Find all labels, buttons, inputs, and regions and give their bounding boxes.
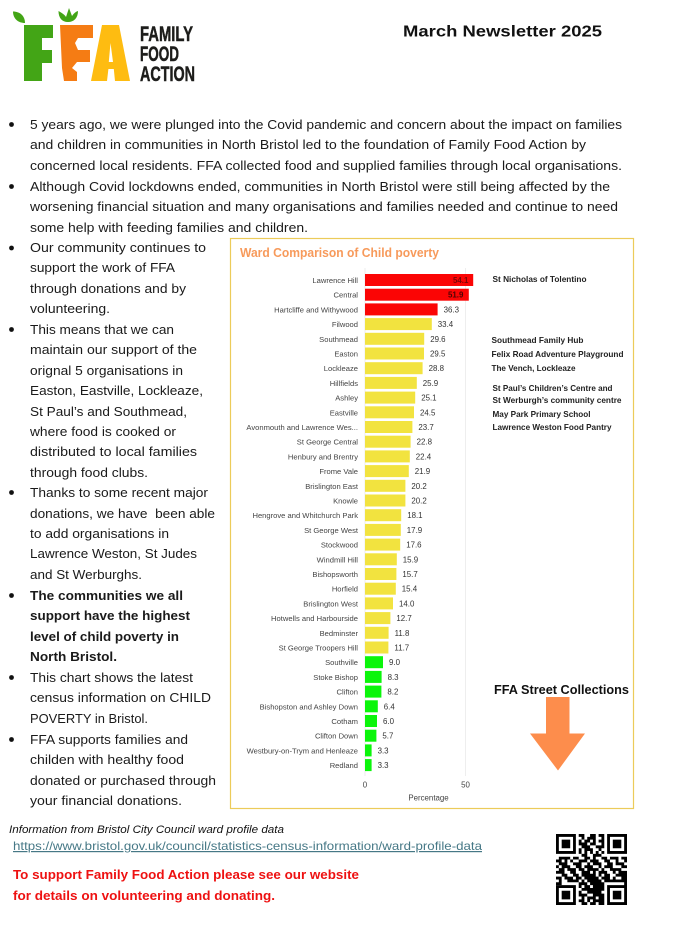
- bar: Southville: Southville: [325, 658, 358, 667]
- bar: Henbury and Brentry: 22.4: [416, 452, 432, 461]
- bar: St George Central: [297, 436, 433, 448]
- text block: chart note bullet: census information on CHILD: [30, 690, 211, 705]
- bar: St George Central: 22.8: [417, 438, 433, 447]
- text block: food support bullet: donated or purchased through: [30, 773, 216, 788]
- letter F green: [24, 25, 53, 81]
- bar: Hengrove and Whitchurch Park: [252, 509, 423, 521]
- text block: chart note bullet: POVERTY in Bristol.: [30, 711, 148, 726]
- bar: Brislington East: [305, 480, 427, 492]
- bar: Stockwood: 17.6: [406, 541, 422, 550]
- organisation labels: St Nicholas of Tolentino: [492, 274, 586, 284]
- text block: donations bullet: to add organisations in: [30, 526, 169, 541]
- bar: Bishopston and Ashley Down: [260, 700, 395, 712]
- bar: Frome Vale: [319, 465, 431, 477]
- bar: Ashley: [335, 392, 437, 404]
- text block: introduction bullets: worsening financial situation and many organisations and families needed and continue to need: [29, 199, 618, 214]
- bar: Westbury-on-Trym and Henleaze: [247, 744, 389, 756]
- text block: introduction bullets: some help with feeding families and children.: [30, 220, 308, 235]
- icon: QR code: [556, 834, 627, 905]
- bar: Stoke Bishop: [313, 671, 399, 683]
- bar: St George West: 17.9: [407, 526, 423, 535]
- bar: Central: [334, 289, 469, 301]
- organisation labels: St Werburgh’s community centre: [492, 395, 622, 405]
- text block: food support bullet: your financial donations.: [30, 793, 182, 808]
- text block: donations bullet: [9, 485, 215, 582]
- bar: Lawrence Hill: Lawrence Hill: [312, 276, 358, 285]
- bar: Brislington East: 20.2: [411, 482, 427, 491]
- bar: Redland: [330, 759, 389, 771]
- bar: Hotwells and Harbourside: Hotwells and Harbourside: [271, 614, 358, 623]
- organisation labels: [492, 274, 624, 432]
- bar: Henbury and Brentry: [288, 450, 432, 462]
- icon: green leaf: [13, 12, 25, 23]
- bar: Brislington East: Brislington East: [305, 482, 359, 491]
- bar: Bedminster: Bedminster: [320, 629, 358, 638]
- bar: Redland: 3.3: [378, 761, 389, 770]
- text block: organisations bullet: St Paul’s and Southmead,: [30, 404, 187, 419]
- chart axis labels: 50: [461, 780, 470, 790]
- bar: Redland: Redland: [330, 761, 358, 770]
- chart title: Ward Comparison of Child poverty: [240, 246, 439, 260]
- logo wordmark: ACTION: [140, 63, 195, 86]
- bar: Cotham: 6.0: [383, 717, 395, 726]
- heading: FFA Street Collections: FFA Street Collections: [494, 683, 629, 697]
- bar: Brislington West: [303, 597, 415, 609]
- text block: community support bullet: [9, 240, 206, 316]
- bar: Lawrence Hill: [312, 274, 473, 286]
- text block: organisations bullet: maintain our support of the: [30, 342, 197, 357]
- bar: Cotham: Cotham: [331, 717, 358, 726]
- text block: highest child poverty bullet: North Bristol.: [30, 649, 117, 664]
- text: data source note: Information from Bristol City Council ward profile data: [9, 824, 284, 836]
- bar: Windmill Hill: 15.9: [403, 555, 419, 564]
- bar: Bishopsworth: 15.7: [402, 570, 418, 579]
- bar: Southmead: [319, 333, 446, 345]
- bar: Bishopsworth: Bishopsworth: [312, 570, 358, 579]
- text block: organisations bullet: distributed to local families: [30, 444, 198, 459]
- text block: community support bullet: support the work of FFA: [30, 260, 175, 275]
- bar: Hotwells and Harbourside: 12.7: [396, 614, 412, 623]
- link: ward profile data: https://www.bristol.gov.uk/council/statistics-census-information/ward-profile-data: [13, 839, 482, 853]
- text block: organisations bullet: where food is cooked or: [29, 424, 177, 439]
- bar: Hartcliffe and Withywood: [274, 303, 460, 315]
- bar: Hartcliffe and Withywood: Hartcliffe and Withywood: [274, 305, 358, 314]
- bar: Cotham: [331, 715, 395, 727]
- text block: food support bullet: [9, 732, 216, 808]
- bar: Frome Vale: 21.9: [415, 467, 431, 476]
- bar: Stockwood: [321, 539, 422, 551]
- text block: organisations bullet: through food clubs.: [30, 465, 148, 480]
- bar: Clifton Down: 5.7: [382, 732, 393, 741]
- bar: Bishopsworth: [312, 568, 418, 580]
- organisation labels: The Vench, Lockleaze: [492, 363, 576, 373]
- logo wordmark: FAMILY: [140, 23, 193, 46]
- organisation labels: May Park Primary School: [492, 409, 590, 419]
- text block: community support bullet: volunteering.: [30, 301, 110, 316]
- letter F orange carrot: [60, 25, 93, 81]
- organisation labels: Southmead Family Hub: [492, 335, 584, 345]
- bar: Knowle: 20.2: [411, 496, 427, 506]
- panel: ward comparison chart: [230, 238, 634, 808]
- title: newsletter date: March Newsletter 2025: [403, 24, 602, 40]
- bar: St George Troopers Hill: [279, 642, 409, 654]
- callout: support Family Food Action: To support Family Food Action please see our website: [13, 867, 359, 882]
- bar: Ashley: Ashley: [335, 394, 358, 403]
- chart axis labels: [363, 780, 470, 802]
- bar chart: child poverty by ward: [246, 274, 473, 771]
- chart axis labels: 0: [363, 780, 368, 790]
- bar: Knowle: Knowle: [333, 496, 358, 506]
- bar: Clifton: Clifton: [336, 688, 358, 697]
- text block: organisations bullet: Easton, Eastville, Lockleaze,: [30, 383, 203, 398]
- bar: Filwood: [332, 318, 454, 330]
- chart axis labels: Percentage: [408, 794, 449, 802]
- bar: Central: Central: [334, 291, 358, 300]
- bar: Stoke Bishop: Stoke Bishop: [313, 673, 358, 682]
- bar: Windmill Hill: [317, 553, 419, 565]
- arrow: pointing down to street collections: [530, 697, 585, 770]
- text block: highest child poverty bullet: The communities we all: [30, 588, 183, 603]
- bar: Eastville: [330, 406, 436, 418]
- bar: Westbury-on-Trym and Henleaze: Westbury-on-Trym and Henleaze: [247, 746, 358, 755]
- logo wordmark: [140, 23, 195, 86]
- bar: Bishopston and Ashley Down: 6.4: [384, 702, 395, 711]
- bar: Hillfields: 25.9: [423, 379, 439, 388]
- text block: community support bullet: Our community continues to: [30, 240, 206, 255]
- text block: donations bullet: Thanks to some recent major: [30, 485, 209, 500]
- bar: Westbury-on-Trym and Henleaze: 3.3: [378, 746, 389, 755]
- text block: chart note bullet: This chart shows the latest: [30, 670, 193, 685]
- bar: Lockleaze: Lockleaze: [324, 364, 358, 373]
- bar: St George West: St George West: [304, 526, 359, 535]
- bar: Horfield: Horfield: [332, 585, 358, 594]
- logo: Family Food Action: [13, 8, 195, 86]
- bar: Southmead: Southmead: [319, 335, 358, 344]
- bar: Brislington West: 14.0: [399, 599, 415, 608]
- text block: introduction bullets: concerned local residents. FFA collected food and supplied families through local organisations.: [30, 158, 622, 173]
- bar: Clifton: 8.2: [387, 688, 398, 697]
- bar: Avonmouth and Lawrence Weston: [246, 421, 434, 433]
- text block: food support bullet: childen with healthy food: [30, 752, 184, 767]
- bar: Hillfields: Hillfields: [330, 379, 358, 388]
- bar: Lawrence Hill: 54.1: [453, 276, 469, 285]
- text block: highest child poverty bullet: level of child poverty in: [30, 629, 179, 644]
- bar: Hengrove and Whitchurch Park: 18.1: [407, 511, 423, 520]
- logo wordmark: FOOD: [140, 43, 179, 66]
- text block: food support bullet: FFA supports families and: [30, 732, 188, 747]
- text block: introduction bullets: [9, 117, 623, 235]
- bar: Filwood: Filwood: [332, 320, 358, 329]
- bar: Central: 51.9: [448, 291, 464, 300]
- bar: Bedminster: 11.8: [395, 629, 410, 638]
- bar: Frome Vale: Frome Vale: [319, 467, 358, 476]
- text block: introduction bullets: and children in communities in North Bristol led to the foundation of Family Food Action by: [30, 137, 587, 152]
- text block: donations bullet: and St Werburghs.: [30, 567, 142, 582]
- bar: Southville: 9.0: [389, 658, 401, 667]
- bar: Hartcliffe and Withywood: 36.3: [444, 305, 460, 314]
- organisation labels: Lawrence Weston Food Pantry: [492, 422, 612, 432]
- bar: Clifton: [336, 686, 398, 698]
- bar: Southmead: 29.6: [430, 335, 446, 344]
- text block: chart note bullet: [9, 670, 211, 726]
- bar: Easton: 29.5: [430, 350, 446, 358]
- bar: Filwood: 33.4: [438, 320, 454, 329]
- bar: St George Troopers Hill: 11.7: [394, 644, 409, 652]
- bar: Brislington West: Brislington West: [303, 599, 359, 608]
- bar: Clifton Down: Clifton Down: [315, 732, 358, 741]
- bar: St George Troopers Hill: St George Troopers Hill: [279, 644, 358, 652]
- bar: Lockleaze: 28.8: [429, 364, 445, 373]
- text block: donations bullet: Lawrence Weston, St Judes: [30, 546, 198, 561]
- text block: highest child poverty bullet: support have the highest: [30, 608, 191, 623]
- text block: organisations bullet: This means that we can: [30, 322, 174, 337]
- bar: Clifton Down: [315, 730, 393, 742]
- bar: Horfield: 15.4: [402, 585, 418, 594]
- bar: Hengrove and Whitchurch Park: Hengrove and Whitchurch Park: [252, 511, 358, 520]
- bar: Stockwood: Stockwood: [321, 541, 358, 550]
- bar: Southville: [325, 656, 401, 668]
- bar: Eastville: Eastville: [330, 408, 358, 417]
- letter A yellow: [91, 25, 130, 81]
- bar: St George West: [304, 524, 423, 536]
- bar: Bishopston and Ashley Down: Bishopston and Ashley Down: [260, 702, 358, 711]
- bar: Lockleaze: [324, 362, 445, 374]
- bar: Stoke Bishop: 8.3: [388, 673, 399, 682]
- bar: Windmill Hill: Windmill Hill: [317, 555, 358, 564]
- bar: Avonmouth and Lawrence Weston: Avonmouth and Lawrence Wes...: [246, 423, 358, 432]
- bar: Ashley: 25.1: [421, 394, 437, 403]
- icon: carrot leaves: [58, 8, 78, 22]
- bar: Easton: [334, 348, 446, 360]
- text block: organisations bullet: orignal 5 organisations in: [30, 363, 183, 378]
- bar: Eastville: 24.5: [420, 408, 436, 417]
- bar: Easton: Easton: [334, 350, 358, 358]
- organisation labels: St Paul’s Children’s Centre and: [492, 383, 612, 393]
- callout: support Family Food Action: [13, 867, 359, 903]
- organisation labels: Felix Road Adventure Playground: [492, 349, 624, 359]
- text block: donations bullet: donations, we have been able: [30, 506, 215, 521]
- bar: Knowle: [333, 494, 427, 506]
- bar: Hillfields: [330, 377, 439, 389]
- callout: support Family Food Action: for details on volunteering and donating.: [13, 888, 275, 903]
- text block: introduction bullets: Although Covid lockdowns ended, communities in North Bristol were still being affected by the: [30, 179, 610, 194]
- text block: community support bullet: through donations and by: [30, 281, 187, 296]
- bar: St George Central: St George Central: [297, 438, 358, 447]
- bar: Horfield: [332, 583, 418, 595]
- text block: highest child poverty bullet: [9, 588, 191, 664]
- bar: Bedminster: [320, 627, 410, 639]
- bar: Avonmouth and Lawrence Weston: 23.7: [418, 423, 434, 432]
- bar: Hotwells and Harbourside: [271, 612, 412, 624]
- bar: Henbury and Brentry: Henbury and Brentry: [288, 452, 358, 461]
- text block: introduction bullets: 5 years ago, we were plunged into the Covid pandemic and concern about the impact on families: [30, 117, 623, 132]
- text block: organisations bullet: [9, 322, 203, 480]
